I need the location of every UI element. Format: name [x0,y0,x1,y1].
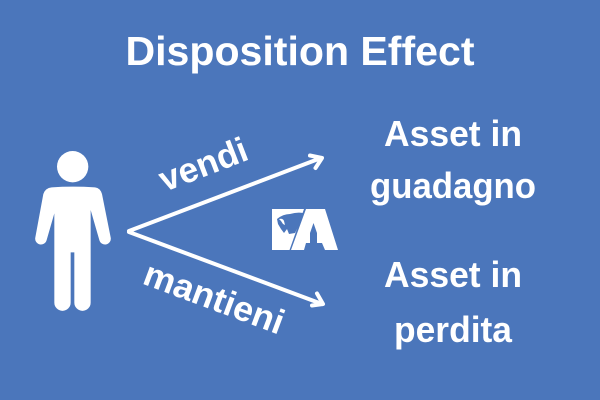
label: vendi: vendi [153,130,253,199]
logo: FA [272,209,338,250]
text: asset in guadagno [370,113,536,206]
text: asset in guadagno: guadagno [370,165,536,206]
title: Disposition Effect [126,28,475,74]
icon: person [35,151,111,311]
text: asset in perdita: Asset in [384,254,522,295]
label: mantieni: mantieni [138,254,290,342]
text: asset in perdita: perdita [394,309,513,350]
arrow: mantieni [129,232,323,306]
text: asset in perdita [384,254,522,350]
arrow: vendi [129,156,322,231]
text: asset in guadagno: Asset in [384,113,522,154]
